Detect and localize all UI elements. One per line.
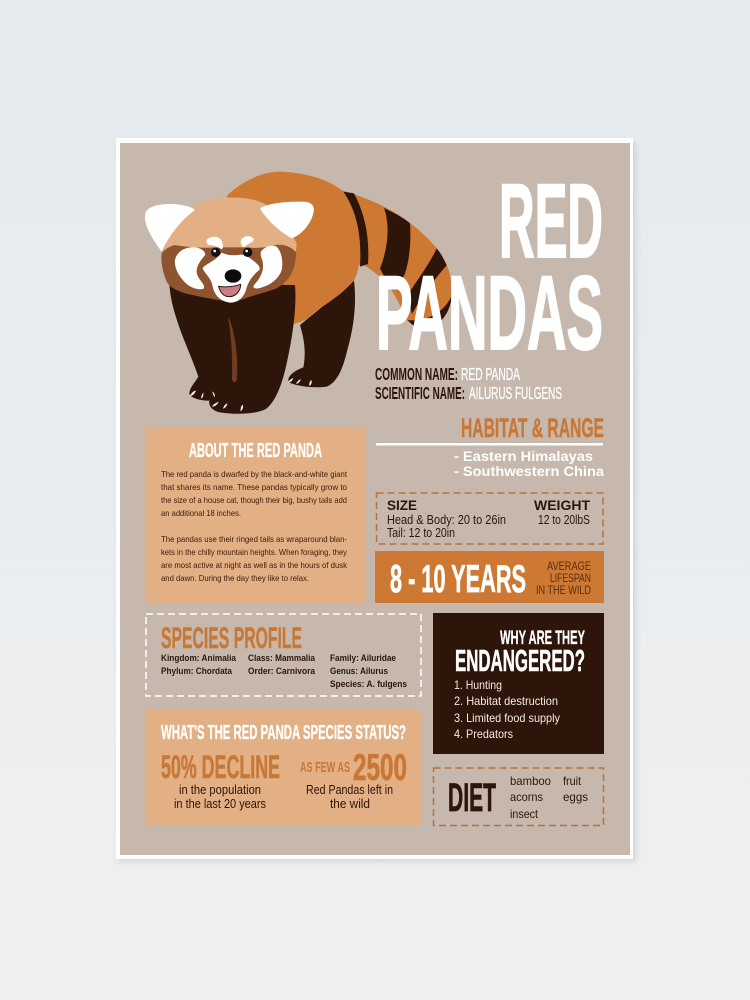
stat: decline: in the population xyxy=(179,783,261,797)
taxonomy list: Order: Carnivora xyxy=(248,666,316,676)
panda mouth xyxy=(219,284,241,297)
threats list: 3. Limited food supply xyxy=(454,711,560,725)
panel: diet xyxy=(434,768,604,826)
threats list: 1. Hunting xyxy=(454,678,502,692)
stat: decline: 50% DECLINE xyxy=(161,749,280,785)
about text: and dawn. During the day they like to relax. xyxy=(161,573,309,583)
panda tail first ring xyxy=(343,192,368,267)
panda tail xyxy=(340,190,452,329)
panel: why endangered: WHY ARE THEY xyxy=(500,627,585,649)
threats list: 2. Habitat destruction xyxy=(454,694,558,708)
panel: species profile: SPECIES PROFILE xyxy=(161,622,302,655)
taxonomy list xyxy=(161,653,407,689)
stat: remaining: AS FEW AS xyxy=(300,759,350,776)
panel: lifespan: IN THE WILD xyxy=(536,583,591,597)
panda front legs xyxy=(169,284,295,414)
diet list: eggs xyxy=(563,790,588,804)
panel: size and weight: WEIGHT xyxy=(534,497,590,513)
taxonomy list: Kingdom: Animalia xyxy=(161,653,237,663)
panda head xyxy=(145,197,314,303)
habitat list: - Southwestern China xyxy=(454,463,604,479)
panel: diet: DIET xyxy=(448,776,496,820)
diet list: insect xyxy=(510,807,539,821)
panda body xyxy=(227,172,361,324)
panel: size and weight: Tail: 12 to 20in xyxy=(387,526,455,540)
habitat list: - Eastern Himalayas xyxy=(454,448,593,464)
panda cheeks xyxy=(175,246,282,289)
taxonomy list: Family: Ailuridae xyxy=(330,653,396,663)
common and scientific names: SCIENTIFIC NAME: xyxy=(375,383,465,403)
panda muzzle xyxy=(203,253,260,303)
diet list: acorns xyxy=(510,790,543,804)
taxonomy list: Genus: Ailurus xyxy=(330,666,388,676)
illustration: red panda xyxy=(145,172,452,414)
taxonomy list: Phylum: Chordata xyxy=(161,666,233,676)
stat: remaining xyxy=(300,746,407,811)
taxonomy list: Species: A. fulgens xyxy=(330,679,407,689)
stat: decline xyxy=(161,749,280,811)
threats list xyxy=(454,678,560,741)
stat: remaining: Red Pandas left in xyxy=(306,783,393,797)
common and scientific names xyxy=(375,364,562,403)
panda eye patches xyxy=(197,247,263,289)
panel: about the red panda xyxy=(145,427,366,603)
panel: lifespan: LIFESPAN xyxy=(550,571,591,585)
heading: habitat and range: HABITAT & RANGE xyxy=(461,413,604,443)
habitat list xyxy=(454,448,604,479)
panda brow marks xyxy=(206,236,254,249)
panel: why endangered: ENDANGERED? xyxy=(455,643,585,678)
panel: size and weight: 12 to 20lbS xyxy=(538,513,590,527)
common and scientific names: RED PANDA xyxy=(461,364,520,384)
poster scene: RED xyxy=(499,163,603,280)
diet list xyxy=(510,774,588,821)
stat: decline: in the last 20 years xyxy=(174,797,266,811)
panel: species profile xyxy=(146,614,421,696)
about text xyxy=(161,469,348,583)
about text: the size of a house cat, though their big, bushy tails add xyxy=(161,495,347,505)
panda eyes xyxy=(211,248,252,257)
panel: size and weight xyxy=(376,493,603,544)
panel: lifespan xyxy=(375,551,604,603)
panel: species status: WHAT'S THE RED PANDA SPECIES STATUS? xyxy=(161,721,406,744)
poster frame xyxy=(116,138,633,859)
common and scientific names: COMMON NAME: xyxy=(375,364,458,384)
panda ears xyxy=(145,202,314,252)
panel: size and weight: SIZE xyxy=(387,497,417,513)
panda leg highlight xyxy=(228,317,237,382)
panel: species status xyxy=(145,710,422,826)
panda nose xyxy=(225,269,241,283)
panel: about the red panda: ABOUT THE RED PANDA xyxy=(189,439,322,462)
diet list: fruit xyxy=(563,774,582,788)
diet list: bamboo xyxy=(510,774,551,788)
panel: lifespan: AVERAGE xyxy=(547,559,591,573)
panel: size and weight: Head & Body: 20 to 26in xyxy=(387,513,506,527)
about text: are most active at night as well as in the hours of dusk xyxy=(161,560,348,570)
stat: remaining: 2500 xyxy=(353,746,407,788)
stat: remaining: the wild xyxy=(330,797,370,811)
taxonomy list: Class: Mammalia xyxy=(248,653,316,663)
panel: why endangered xyxy=(433,613,604,754)
about text: that shares its name. These pandas typically grow to xyxy=(161,482,347,492)
about text: The pandas use their ringed tails as wraparound blan- xyxy=(161,534,347,544)
common and scientific names: AILURUS FULGENS xyxy=(469,383,562,403)
threats list: 4. Predators xyxy=(454,727,513,741)
title xyxy=(376,163,603,372)
panda back leg xyxy=(288,281,355,387)
panel: lifespan: 8 - 10 YEARS xyxy=(390,558,526,601)
about text: The red panda is dwarfed by the black-and-white giant xyxy=(161,469,348,479)
about text: an additional 18 inches. xyxy=(161,508,241,518)
about text: kets in the chilly mountain heights. When foraging, they xyxy=(161,547,348,557)
panda claws xyxy=(190,378,312,411)
